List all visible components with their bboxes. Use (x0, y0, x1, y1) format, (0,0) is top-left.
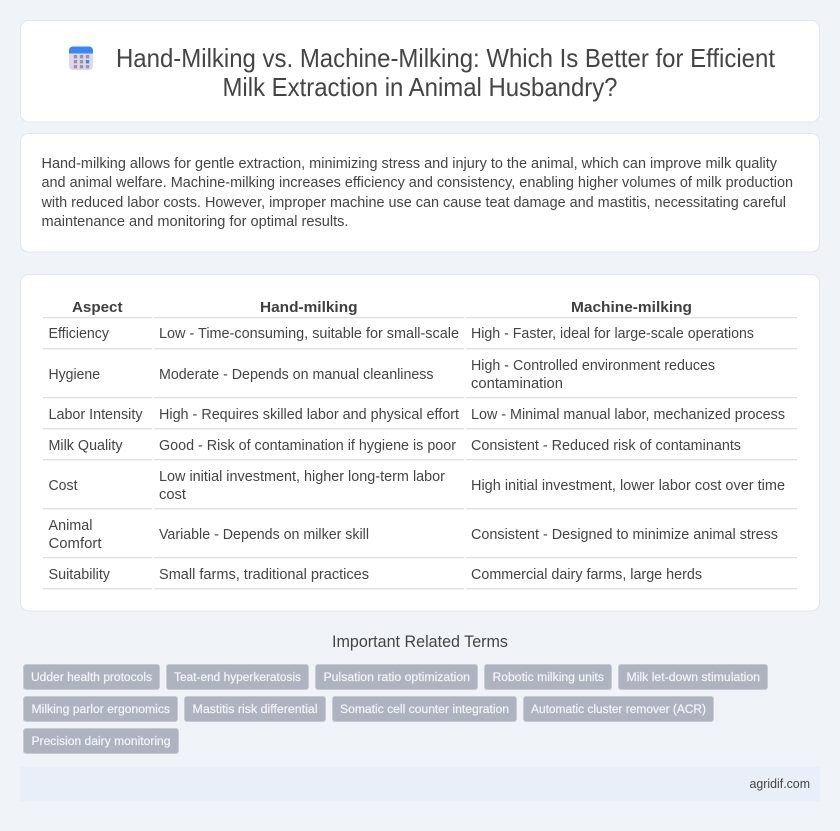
table header row (72, 300, 692, 316)
table row: labor intensity: High - Requires skilled labor and physical effort (159, 407, 459, 423)
tag: precision dairy monitoring: Precision dairy monitoring (32, 734, 171, 748)
table row: suitability: Commercial dairy farms, large herds (471, 567, 702, 583)
title: Hand-Milking vs. Machine-Milking: Which Is Better for Efficient (116, 43, 776, 73)
table header row: Aspect (72, 300, 123, 316)
table row: labor intensity: Labor Intensity (48, 407, 143, 423)
table row: suitability: Suitability (48, 567, 111, 583)
panel: summary paragraph (20, 134, 820, 252)
table row: animal comfort: Consistent - Designed to minimize animal stress (471, 527, 778, 543)
table row: animal comfort (48, 518, 778, 552)
text block: summary: and animal welfare. Machine-milking increases efficiency and consistency, enabling higher volumes of milk production (42, 175, 793, 191)
tag: somatic cell counter integration (332, 696, 516, 722)
table row: animal comfort: Comfort (48, 536, 102, 552)
text block: summary: Hand-milking allows for gentle extraction, minimizing stress and injury to the animal, which can improve milk quality (42, 156, 778, 172)
table row: cost (48, 469, 785, 503)
tag: precision dairy monitoring (24, 728, 178, 754)
table row: efficiency: Low - Time-consuming, suitable for small-scale (159, 326, 459, 342)
tag: udder health protocols: Udder health protocols (31, 670, 152, 684)
tag: pulsation ratio optimization (316, 664, 478, 690)
title: Milk Extraction in Animal Husbandry? (222, 72, 618, 102)
table row: cost: cost (159, 487, 186, 503)
table row: milk quality: Good - Risk of contamination if hygiene is poor (159, 438, 456, 454)
table row: efficiency: Efficiency (48, 326, 110, 342)
table row: labor intensity: Low - Minimal manual labor, mechanized process (471, 407, 785, 423)
table row: hygiene: Moderate - Depends on manual cleanliness (159, 367, 434, 383)
table row: labor intensity (48, 407, 785, 423)
table row: hygiene: High - Controlled environment reduces (471, 358, 715, 374)
table row: hygiene: contamination (471, 376, 563, 392)
table header row: Machine-milking (571, 300, 692, 316)
tag: somatic cell counter integration: Somatic cell counter integration (340, 702, 509, 716)
icon: calendar grid (69, 46, 93, 70)
tag: automatic cluster remover (524, 696, 714, 722)
table header row: Hand-milking (260, 300, 358, 316)
tag: milk let-down stimulation: Milk let-down stimulation (626, 670, 760, 684)
table row: milk quality: Consistent - Reduced risk of contaminants (471, 438, 741, 454)
tag: robotic milking units (484, 664, 612, 690)
table row: animal comfort: Animal (48, 518, 92, 534)
panel: header (20, 20, 820, 122)
title (116, 43, 776, 102)
table row: hygiene (48, 358, 715, 392)
panel: comparison table (20, 274, 820, 611)
table row: efficiency (48, 326, 754, 342)
tag: teat-end hyperkeratosis (166, 664, 308, 690)
tag: pulsation ratio optimization: Pulsation ratio optimization (324, 670, 470, 684)
table row: cost: High initial investment, lower labor cost over time (471, 478, 785, 494)
tag: robotic milking units: Robotic milking units (492, 670, 604, 684)
tag: teat-end hyperkeratosis: Teat-end hyperkeratosis (174, 670, 301, 684)
tag: udder health protocols (24, 664, 160, 690)
text block: summary: with reduced labor costs. However, improper machine use can cause teat damage and mastitis, necessitating careful (41, 195, 786, 211)
tag: automatic cluster remover: Automatic cluster remover (ACR) (531, 702, 706, 716)
table row: milk quality (48, 438, 741, 454)
tag: milk let-down stimulation (618, 664, 768, 690)
table row: cost: Low initial investment, higher long-term labor (159, 469, 445, 485)
tag: milking parlor ergonomics: Milking parlor ergonomics (32, 702, 170, 716)
table row: animal comfort: Variable - Depends on milker skill (159, 527, 369, 543)
table row: hygiene: Hygiene (48, 367, 100, 383)
tag: milking parlor ergonomics (24, 696, 178, 722)
text block: summary: maintenance and monitoring for optimal results. (42, 214, 348, 230)
footer text: site name: agridif.com (750, 776, 810, 791)
text block: summary (41, 156, 793, 230)
table row: efficiency: High - Faster, ideal for large-scale operations (471, 326, 754, 342)
table row: suitability (48, 567, 702, 583)
heading: related terms: Important Related Terms (332, 633, 508, 651)
table row: cost: Cost (48, 478, 78, 494)
footer bar (20, 767, 820, 801)
tag group: related terms (24, 664, 768, 754)
tag: mastitis risk differential (184, 696, 326, 722)
table row: suitability: Small farms, traditional practices (159, 567, 369, 583)
table row: milk quality: Milk Quality (48, 438, 123, 454)
tag: mastitis risk differential: Mastitis risk differential (192, 702, 318, 716)
